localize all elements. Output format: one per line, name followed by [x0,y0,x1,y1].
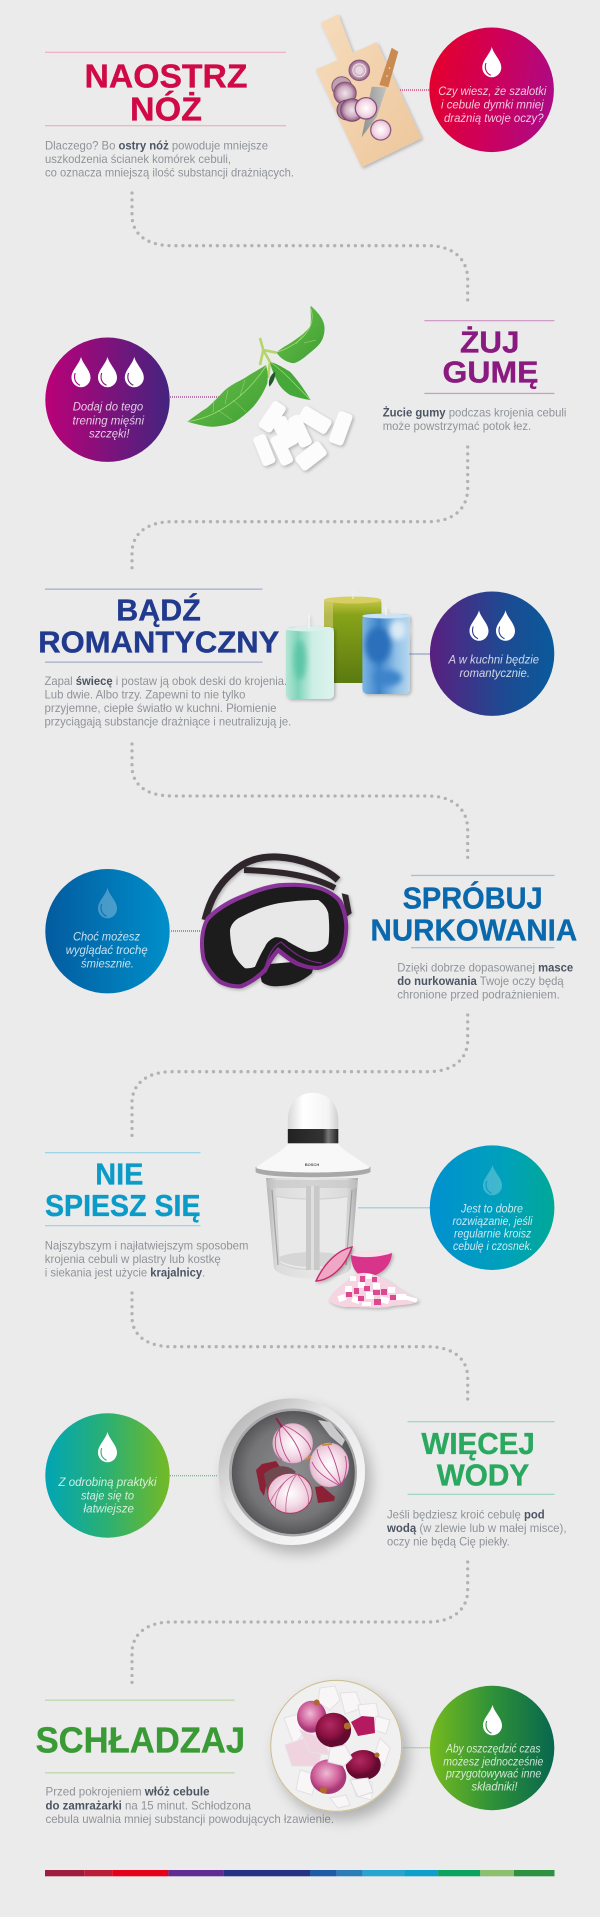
connector [410,653,430,655]
callout: regular chopping [430,1145,554,1270]
heading: Więcej wody: WODY [437,1458,530,1493]
connector [400,89,430,91]
body text [383,405,566,433]
heading: Schładzaj: SCHŁADZAJ [36,1719,245,1760]
heading: Żuj gumę: ŻUJ [460,325,520,360]
body text: cebula uwalnia mniej substancji powodujących łzawienie. [46,1812,334,1826]
pink-tinted ice [285,1730,330,1766]
green candle [324,590,382,683]
callout: practice: łatwiejsze [84,1502,134,1516]
purple frame [200,883,348,988]
callout: regular chopping: cebulę i czosnek. [453,1239,533,1253]
onion half 3 [268,1473,312,1513]
body text: może powstrzymać potok łez. [383,419,531,433]
glass bowl [266,1178,358,1278]
body text [45,138,294,179]
heading: Spróbuj nurkowania: SPRÓBUJ [403,879,543,915]
callout: romantic kitchen: romantycznie. [460,666,530,680]
illustration: diving mask [200,857,352,988]
heading: Spróbuj nurkowania: NURKOWANIA [370,912,577,947]
section 7: chill [36,1680,554,1826]
section 2: chew gum [45,306,566,472]
body text: Najszybszym i najłatwiejszym sposobem [45,1238,248,1252]
icon: water drop [98,1432,117,1462]
callout: save time [430,1686,554,1810]
icon: pale water drop [98,888,117,918]
illustration: three candles [286,590,410,699]
callout: funny look [45,869,170,993]
heading: Żuj gumę: GUMĘ [442,355,538,390]
lid rim [256,1167,370,1177]
icon: three water drops [72,357,144,387]
heading: Naostrz nóż: NAOSTRZ [84,58,248,94]
callout: romantic kitchen [430,592,554,716]
callout: jaw training [45,338,170,462]
strap [205,857,338,920]
top ice [328,1745,373,1797]
dome [288,1093,338,1129]
body text: do nurkowania Twoje oczy będą [397,974,564,988]
callout: save time: składniki! [472,1779,518,1793]
body text [45,1238,248,1280]
illustration: food chopper with onion [256,1093,419,1308]
body text: Żucie gumy podczas krojenia cebuli [383,405,566,420]
dotted path 5 [132,1293,468,1404]
onions [297,1700,381,1794]
body text: Jeśli będziesz kroić cebulę pod [387,1508,545,1522]
body text: Zapal świecę i postaw ją obok deski do krojenia. [44,674,287,688]
icon: two water drops [470,610,515,641]
footer colour bar [45,1870,554,1876]
onion half 2 [310,1443,348,1487]
onion half 1 [273,1418,312,1463]
section 4: try diving [45,857,577,1001]
heading: Spróbuj nurkowania [370,875,577,948]
callout: regular chopping: Jest to dobre [460,1202,523,1216]
heading: Żuj gumę [424,320,554,394]
heading: Nie spiesz się [45,1152,200,1226]
callout: jaw training: Dodaj do tego [73,400,143,414]
icon: pale water drop [483,1165,502,1195]
body text: uszkodzenia ścianek komórek cebuli, [45,152,231,166]
section 1: sharpen knife [45,14,554,179]
connector [170,396,222,398]
chewing gum pieces [252,400,353,472]
body text [386,1508,566,1549]
onion halves [316,1247,392,1281]
callout: save time: możesz jednocześnie [443,1754,544,1768]
body text: Dlaczego? Bo ostry nóż powoduje mniejsze [45,138,268,152]
heading: Nie spiesz się: NIE [95,1156,143,1191]
body text: Przed pokrojeniem włóż cebule [46,1785,210,1799]
white lid [256,1143,370,1172]
callout: save time: przygotowywać inne [445,1767,542,1781]
callout: practice [45,1413,170,1538]
illustration: cutting board with onion and knife [316,14,422,167]
section 3: be romantic [38,588,554,729]
dotted path 6 [132,1562,468,1683]
callout: jaw training: trening mięśni [72,413,144,427]
illustration: steel bowl with onions in water [218,1398,365,1545]
callout: save time: Aby oszczędzić czas [445,1742,540,1756]
body text [46,1785,334,1826]
section 6: more water [45,1398,567,1549]
callout: shallots: Czy wiesz, że szalotki [438,84,547,98]
connector [403,1747,430,1749]
body text: co oznacza mniejszą ilość substancji drażniących. [45,165,294,179]
ice cubes [284,1686,390,1808]
connector [170,1475,218,1477]
blue candle [362,607,410,694]
nose ridge [265,942,322,968]
body text: przyciągają substancje drażniące i neutralizują je. [44,715,291,729]
diced onion [328,1273,419,1308]
callout: regular chopping: rozwiązanie, jeśli [452,1214,533,1228]
dotted path 2 [132,447,468,573]
callout: funny look: Choć możesz [73,929,140,943]
callout: regular chopping: regularnie kroisz [454,1227,531,1241]
body text: wodą (w zlewie lub w małej misce), [386,1521,566,1535]
body text: Dzięki dobrze dopasowanej masce [397,960,573,974]
body text: Lub dwie. Albo trzy. Zapewni to nie tylko [44,688,246,702]
onion skins [256,1461,282,1496]
body text: i siekania jest użycie krajalnicy. [45,1266,205,1280]
icon: water drop [483,1705,502,1735]
heading: Więcej wody: WIĘCEJ [421,1426,535,1461]
body text: oczy nie będą Cię piekły. [387,1535,510,1549]
connector [171,930,200,932]
callout: shallots: drażnią twoje oczy? [444,111,544,125]
heading: Bądź romantyczny: ROMANTYCZNY [38,625,280,660]
callout: shallots: i cebule dymki mniej [441,97,544,111]
body text [397,960,573,1001]
connector [359,1207,430,1209]
mouth piece [258,960,316,986]
body text: przyjemne, ciepłe światło w kuchni. Płomienie [44,701,277,715]
black inner frame [204,887,344,984]
illustration: plate of onions on ice [271,1680,402,1811]
body text [44,674,291,729]
illustration: mint leaves and chewing gum [187,306,353,472]
section 5: don't hurry [45,1093,554,1308]
callout: practice: Z odrobiną praktyki [58,1475,157,1489]
callout: practice: staje się to [81,1488,134,1502]
dotted path 1 [132,193,468,303]
heading: Naostrz nóż: NÓŻ [130,91,202,128]
icon: water drop [482,47,501,77]
heading: Naostrz nóż [45,52,286,128]
heading: Więcej wody [408,1421,555,1495]
heading: Nie spiesz się: SPIESZ SIĘ [45,1188,200,1223]
mint leaves [187,306,325,427]
body text: do zamrażarki na 15 minut. Schłodzona [46,1798,251,1812]
heading: Bądź romantyczny: BĄDŹ [116,593,201,628]
teal candle [286,615,334,699]
heading: Bądź romantyczny [38,588,280,663]
callout: funny look: śmiesznie. [81,956,134,970]
body text: chronione przed podrażnieniem. [397,987,560,1001]
callout: jaw training: szczęki! [89,427,130,441]
dotted path 3 [132,744,468,858]
glass lens [230,900,329,968]
body text: krojenia cebuli w plastry lub kostkę [45,1252,221,1266]
logo: BOSCH [305,1162,319,1167]
callout: shallots [429,28,554,152]
callout: romantic kitchen: A w kuchni będzie [448,652,539,666]
dotted path 4 [132,1015,468,1136]
black band [288,1129,338,1143]
callout: funny look: wyglądać trochę [66,943,148,957]
